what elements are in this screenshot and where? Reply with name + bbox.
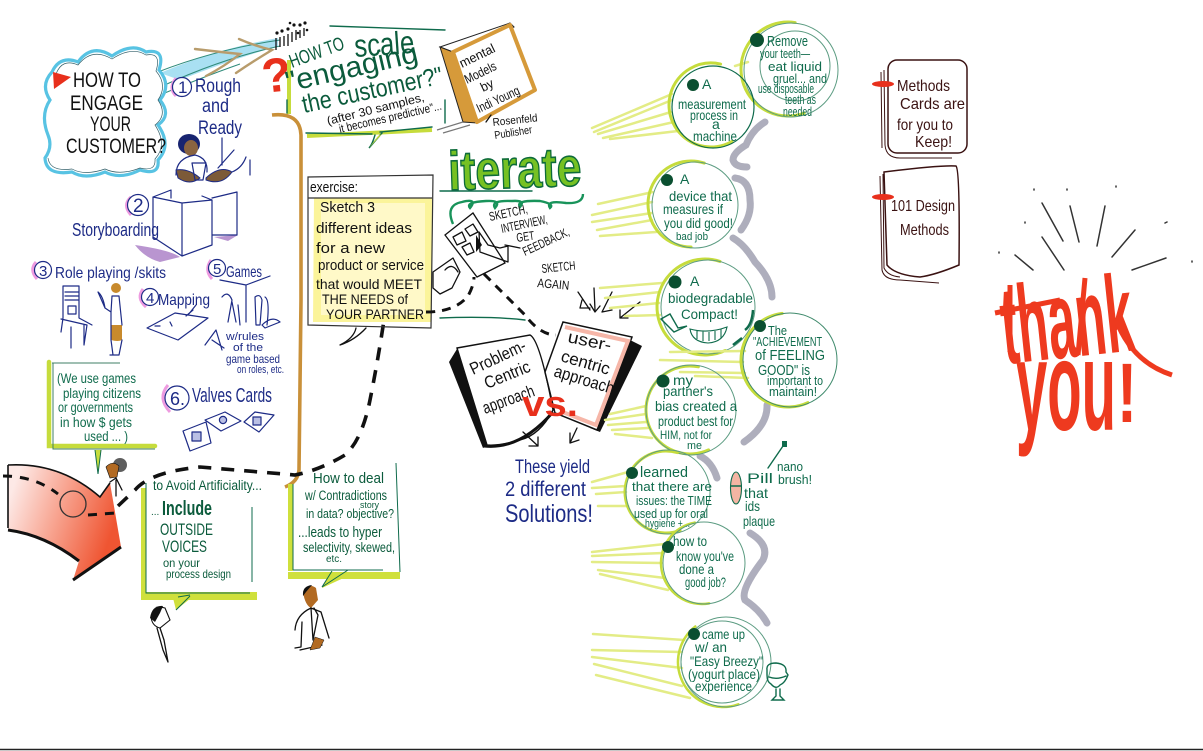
- callout: to avoid artificiality: VOICES: [162, 537, 207, 556]
- idea circle: easy breezy: [592, 604, 781, 720]
- idea circle: biodegradable compact: biodegradable: [668, 290, 753, 306]
- text: sketch interview feedback: SKETCH: [541, 259, 576, 276]
- method 3: role playing skits: 3: [39, 263, 47, 280]
- panel: exercise: YOUR PARTNER: [326, 306, 424, 322]
- book: problem-centric approach: Centric: [481, 357, 533, 393]
- panel: exercise: product or service: [318, 257, 424, 274]
- idea circle: remove your teeth: [728, 9, 848, 129]
- text: sketch interview feedback: [488, 202, 576, 293]
- panel: how to scale heading: [282, 24, 445, 148]
- callout: how to deal with contradictions: etc.: [326, 554, 342, 565]
- note: nano brush: [768, 441, 812, 487]
- idea circle: measurement process: a: [712, 116, 720, 132]
- idea circle: measurement process: [592, 48, 768, 162]
- idea circle: partner's bias: HIM, not for: [660, 428, 712, 442]
- method 1: rough and ready: 1: [178, 78, 187, 97]
- idea circle: achievement of feeling good: "ACHIEVEMENT: [753, 334, 822, 349]
- callout: games citizens governments: or governments: [58, 399, 133, 415]
- method 6: values cards: 6.: [170, 389, 185, 409]
- icon: game players: [205, 276, 280, 350]
- text: sketch interview feedback: FEEDBACK,: [520, 225, 572, 259]
- idea circle: how to know: know you've: [676, 548, 734, 564]
- idea circle: measurement process: process in: [690, 107, 738, 123]
- panel: exercise: for a new: [316, 240, 385, 257]
- panel: how to scale heading: the customer?": [299, 62, 445, 119]
- note: pill that ids plaque: that: [744, 485, 768, 501]
- icon: book mental models: mental: [457, 41, 498, 71]
- method 5: games: 5: [213, 261, 221, 278]
- callout: games citizens governments: [49, 362, 155, 474]
- callout: to avoid artificiality: ...: [151, 507, 159, 518]
- panel: exercise: different ideas: [316, 220, 412, 237]
- heading: thank you: !: [1117, 346, 1137, 440]
- idea circle: measurement process: machine: [693, 128, 737, 144]
- dashed connectors: [426, 274, 556, 335]
- card: methods cards to keep: [872, 60, 967, 158]
- note: pill that ids plaque: plaque: [743, 513, 775, 529]
- idea circle: partner's bias: product best for: [658, 413, 733, 429]
- method 2: storyboarding: Storyboarding: [72, 220, 159, 240]
- method 2: storyboarding: [72, 190, 238, 262]
- dashed path: [118, 320, 384, 506]
- icon: woman speaking: [106, 458, 127, 496]
- callout: how to deal with contradictions: in data? objective?: [306, 506, 394, 521]
- idea circle: remove your teeth: needed: [783, 104, 812, 119]
- text: sketch interview feedback: AGAIN: [537, 276, 570, 293]
- method 3: role playing skits: [33, 262, 166, 355]
- heading: how to engage your customer: [66, 69, 166, 158]
- book: problem-centric approach: approach: [480, 381, 537, 418]
- heading: how to engage your customer: ENGAGE: [70, 92, 143, 115]
- callout: how to deal with contradictions: ...leads to hyper: [298, 524, 382, 541]
- callout: to avoid artificiality: OUTSIDE: [160, 520, 213, 539]
- idea circle: learned issues: hygiene +...: [645, 518, 690, 530]
- idea circle: remove your teeth: Remove: [767, 33, 808, 50]
- panel: exercise: THE NEEDS of: [322, 291, 408, 307]
- idea circle: biodegradable compact: [600, 243, 769, 371]
- note: pill that ids plaque: Pill: [747, 470, 773, 486]
- text: vs: vs.: [522, 383, 578, 424]
- book: user-centric approach: approach: [552, 362, 617, 398]
- method 6: values cards: [163, 385, 274, 451]
- callout: games citizens governments: in how $ gets: [60, 414, 132, 430]
- idea circle: achievement of feeling good: [660, 298, 850, 422]
- idea circle: partner's bias: my: [673, 372, 693, 388]
- book: problem-centric approach: [449, 335, 553, 448]
- idea circle: partner's bias: bias created a: [655, 398, 737, 414]
- note: pill that ids plaque: [730, 470, 775, 529]
- idea circle: learned issues: learned: [640, 464, 688, 481]
- decorative rule: [440, 317, 525, 320]
- idea circle: learned issues: [592, 439, 719, 545]
- idea circle: easy breezy: w/ an: [694, 639, 727, 655]
- heading: how to engage your customer: CUSTOMER?: [66, 135, 166, 158]
- callout: to avoid artificiality: process design: [166, 567, 231, 581]
- panel: exercise: that would MEET: [316, 276, 422, 292]
- idea circle: easy breezy: experience: [695, 678, 752, 694]
- idea circle: partner's bias: me: [687, 440, 702, 452]
- method 5: games: w/rules: [225, 331, 265, 343]
- idea circle: remove your teeth: gruel... and: [773, 71, 827, 86]
- icon: yogurt cup: [767, 663, 788, 700]
- panel: exercise: Sketch 3: [320, 199, 375, 216]
- icon: woman with card: [98, 283, 122, 355]
- callout: games citizens governments: used ... ): [84, 428, 128, 444]
- icon: map sheet: [147, 305, 208, 340]
- idea circle: remove your teeth: your teeth—: [760, 46, 810, 61]
- method 6: values cards: Valves Cards: [192, 385, 272, 407]
- note: nano brush: brush!: [778, 472, 812, 487]
- idea circle: how to know: how to: [673, 533, 707, 549]
- idea circle: learned issues: used up for oral: [634, 506, 708, 521]
- idea circle: achievement of feeling good: important to: [767, 373, 823, 388]
- panel: how to scale heading: (after 30 samples,: [325, 90, 426, 128]
- callout: to avoid artificiality: on your: [163, 558, 200, 570]
- panel: how to scale heading: it becomes predictive"...: [338, 99, 443, 136]
- idea circle: device that measures: you did good!: [664, 215, 733, 231]
- connector: grey squiggle path: [700, 122, 772, 623]
- method 4: mapping: [140, 288, 210, 340]
- idea circle: achievement of feeling good: of FEELING: [755, 347, 825, 364]
- icon: red pointer: [53, 72, 71, 89]
- idea circle: device that measures: measures if: [663, 201, 723, 217]
- card: 101 design methods: 101 Design: [891, 198, 955, 215]
- icon: teeth smile: [690, 327, 727, 343]
- idea circle: biodegradable compact: A: [690, 273, 700, 289]
- text: these yield 2 different solutions: [505, 457, 593, 528]
- method 5: games: of the: [233, 342, 263, 354]
- icon: book mental models: Publisher: [494, 124, 533, 142]
- callout: how to deal with contradictions: story: [360, 500, 379, 510]
- panel: how to scale heading: HOW TO: [287, 33, 347, 73]
- callout: how to deal with contradictions: w/ Contradictions: [304, 488, 387, 503]
- idea circle: partner's bias: [605, 352, 748, 468]
- card: methods cards to keep: for you to: [897, 117, 953, 134]
- arrow: blue streak from cloud to scale heading: [143, 38, 280, 100]
- card: methods cards to keep: Cards are: [900, 96, 965, 113]
- callout: games citizens governments: playing citizens: [63, 385, 141, 401]
- panel: how to scale heading: "engaging: [282, 37, 421, 99]
- heading: how to engage your customer: HOW TO: [73, 69, 141, 92]
- icon: value cards: [183, 412, 274, 451]
- icon: man in tie: [295, 585, 329, 650]
- idea circle: learned issues: issues: the TIME: [636, 493, 712, 508]
- book: user-centric approach: [545, 322, 642, 432]
- callout: to avoid artificiality: [141, 478, 262, 610]
- text: sketch interview feedback: INTERVIEW,: [500, 212, 549, 236]
- icon: burst arrows above user-centric: [578, 288, 640, 318]
- heading: iterate: [440, 135, 583, 224]
- idea circle: device that measures: bad job: [676, 231, 708, 243]
- idea circle: measurement process: A: [702, 76, 712, 92]
- panel: exercise: exercise:: [310, 179, 358, 196]
- idea circle: biodegradable compact: Compact!: [681, 306, 738, 322]
- card: 101 design methods: [872, 166, 959, 283]
- heading: iterate: iterate: [447, 135, 582, 202]
- method 2: storyboarding: 2: [133, 196, 144, 217]
- idea circle: achievement of feeling good: The: [768, 323, 787, 338]
- idea circle: easy breezy: "Easy Breezy": [690, 653, 763, 669]
- heading: thank you: [995, 252, 1172, 458]
- book: user-centric approach: centric: [559, 347, 613, 379]
- idea circle: how to know: [592, 516, 749, 610]
- idea circle: device that measures: A: [680, 171, 690, 187]
- text: these yield 2 different solutions: 2 different: [505, 478, 586, 501]
- idea circle: how to know: good job?: [685, 574, 726, 590]
- idea circle: remove your teeth: teeth as: [785, 92, 816, 107]
- icon: small tray: [661, 314, 687, 332]
- method 4: mapping: Mapping: [158, 292, 210, 309]
- icon: arcade machine: [61, 286, 92, 348]
- icon: book mental models: [437, 23, 538, 142]
- red arrow with dashes: [3, 465, 121, 580]
- icon: man with glasses: [150, 606, 170, 662]
- icon: folding storyboard: [153, 190, 237, 256]
- icon: book mental models: by: [478, 75, 496, 95]
- note: pill that ids plaque: ids: [745, 498, 760, 514]
- decoration: thank you rays: [999, 186, 1192, 270]
- idea circle: how to know: done a: [679, 561, 714, 577]
- callout: how to deal with contradictions: How to deal: [313, 470, 384, 487]
- icon: book mental models: Indi Young: [474, 83, 522, 116]
- idea circle: achievement of feeling good: GOOD" is: [758, 362, 810, 379]
- idea circle: easy breezy: (yogurt place): [688, 666, 760, 682]
- method 4: mapping: 4: [146, 290, 154, 307]
- panel: cloud question: [44, 48, 166, 176]
- idea circle: remove your teeth: eat liquid: [768, 59, 822, 74]
- idea circle: device that measures: [592, 161, 738, 248]
- text: these yield 2 different solutions: These yield: [515, 457, 590, 478]
- method 1: rough and ready: and: [202, 96, 229, 117]
- text: sketch interview feedback: GET: [515, 229, 535, 245]
- callout: to avoid artificiality: Include: [162, 498, 212, 520]
- method 1: rough and ready: Ready: [198, 118, 242, 139]
- text: these yield 2 different solutions: Solutions!: [505, 500, 593, 528]
- icon: book mental models: Models: [462, 58, 499, 87]
- method 1: rough and ready: [172, 76, 250, 182]
- heading: how to engage your customer: YOUR: [90, 113, 131, 136]
- idea circle: partner's bias: partner's: [663, 383, 713, 399]
- book: user-centric approach: user-: [566, 327, 613, 355]
- idea circle: measurement process: measurement: [678, 96, 746, 112]
- method 5: games: Games: [226, 264, 262, 281]
- idea circle: remove your teeth: use disposable: [758, 81, 814, 96]
- icon: book mental models: Rosenfeld: [492, 112, 538, 129]
- bracket: orange divider: [272, 115, 301, 487]
- book: problem-centric approach: Problem-: [467, 336, 529, 379]
- idea circle: learned issues: that there are: [632, 479, 712, 494]
- callout: to avoid artificiality: to Avoid Artificiality...: [153, 478, 262, 493]
- idea circle: device that measures: device that: [669, 188, 732, 204]
- panel: how to scale heading: scale: [353, 24, 415, 64]
- card: methods cards to keep: Keep!: [915, 134, 952, 151]
- panel: exercise: [308, 175, 433, 345]
- method 5: games: [205, 260, 284, 376]
- method 3: role playing skits: Role playing /skits: [55, 265, 166, 282]
- icon: arrows to solutions: [523, 428, 579, 446]
- callout: how to deal with contradictions: selectivity, skewed,: [303, 540, 395, 555]
- method 5: games: on roles, etc.: [237, 364, 284, 376]
- icon: red question mark: ?: [259, 48, 294, 104]
- idea circle: achievement of feeling good: maintain!: [769, 384, 817, 399]
- idea circle: easy breezy: came up: [702, 626, 745, 642]
- card: methods cards to keep: Methods: [897, 78, 950, 95]
- card: 101 design methods: Methods: [900, 222, 949, 239]
- icon: person with cup: [176, 134, 250, 182]
- callout: games citizens governments: (We use games: [57, 370, 136, 386]
- text: sketch interview feedback: SKETCH,: [488, 202, 529, 224]
- method 1: rough and ready: Rough: [195, 76, 241, 97]
- method 5: games: game based: [226, 352, 280, 366]
- callout: how to deal with contradictions: [288, 463, 400, 588]
- note: nano brush: nano: [777, 459, 803, 474]
- icon: crowd of people: [275, 21, 308, 50]
- icon: hand holding sketch card: [433, 213, 520, 294]
